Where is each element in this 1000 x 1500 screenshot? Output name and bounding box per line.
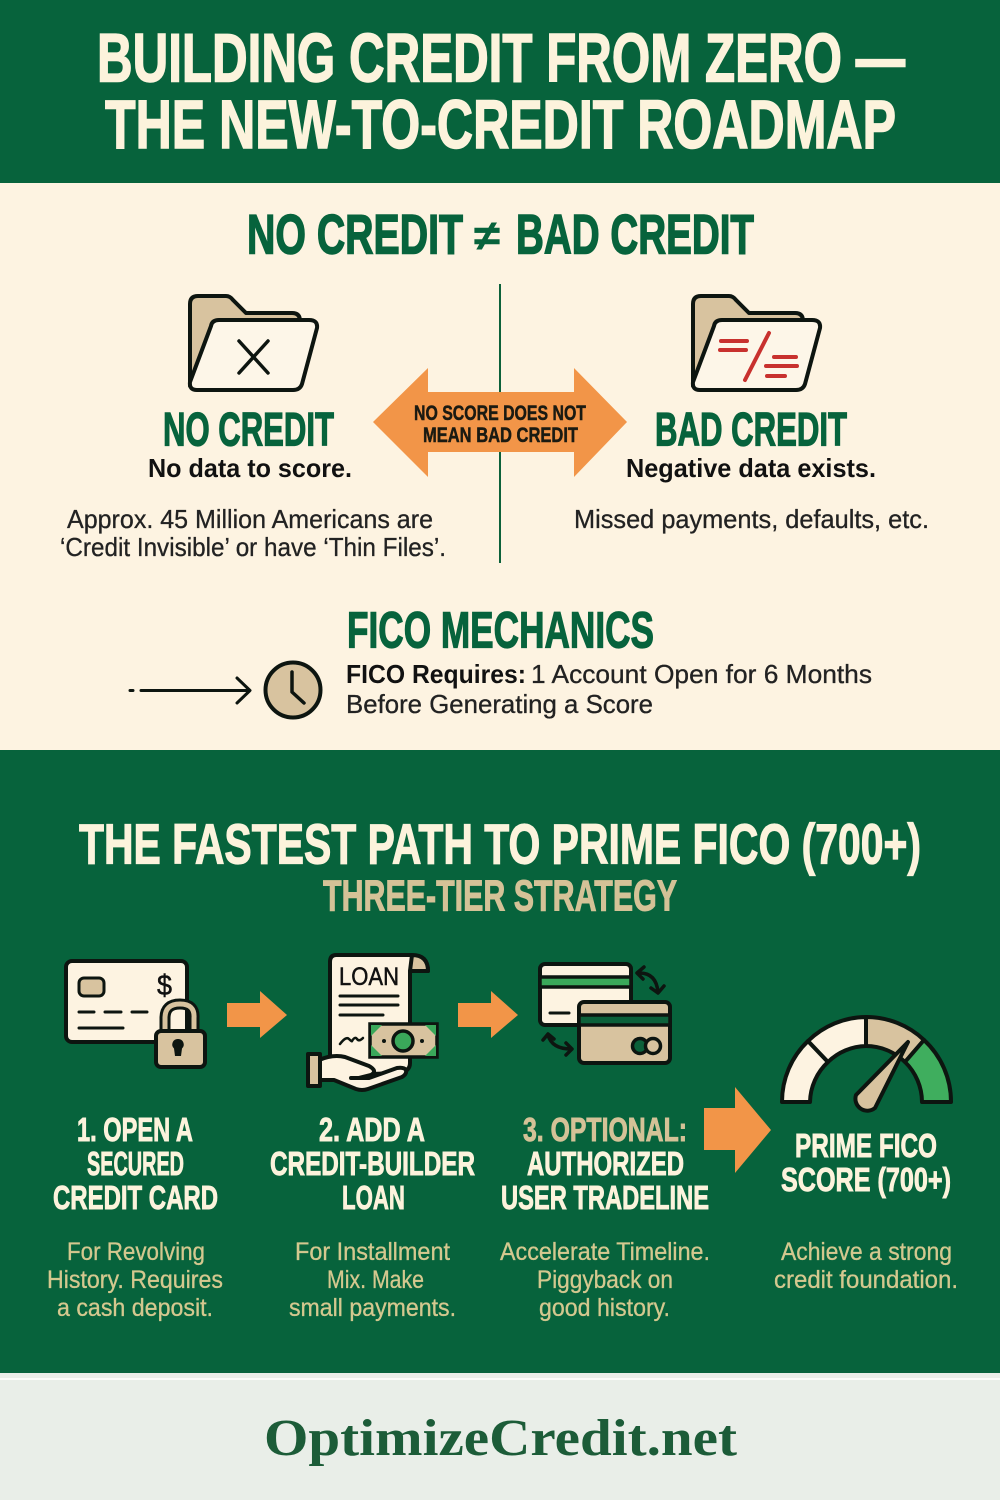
callout arrow: no score does not mean bad credit: NO SCORE DOES NOT	[414, 402, 586, 425]
fico requirement text	[346, 659, 872, 719]
heading: fico mechanics: FICO MECHANICS	[347, 602, 654, 658]
panel: no credit vs bad credit	[0, 183, 1000, 750]
fico requirement text: Before Generating a Score	[346, 689, 653, 719]
prime fico text: SCORE (700+)	[781, 1161, 951, 1198]
heading: no credit is not bad credit: BAD CREDIT	[516, 202, 754, 266]
prime fico text: credit foundation.	[774, 1266, 958, 1294]
bad credit text block: Negative data exists.	[626, 453, 876, 483]
no credit text block: NO CREDIT	[163, 402, 334, 456]
arrow: step 3 to prime score	[704, 1087, 771, 1173]
step 1 text: SECURED	[87, 1145, 184, 1182]
prime fico text: PRIME FICO	[795, 1127, 937, 1164]
step 1 text: CREDIT CARD	[53, 1179, 218, 1216]
step 2 text: LOAN	[342, 1179, 405, 1216]
step 2 text: For Installment	[295, 1238, 450, 1266]
step 3 text	[500, 1111, 710, 1322]
callout arrow: no score does not mean bad credit: MEAN BAD CREDIT	[423, 424, 578, 447]
bad credit text block	[574, 402, 929, 534]
step 3 text: good history.	[539, 1294, 670, 1322]
bad credit text block: BAD CREDIT	[655, 402, 847, 456]
step 2 text: Mix. Make	[327, 1266, 424, 1294]
step 3 text: AUTHORIZED	[527, 1145, 684, 1182]
panel: fastest path	[0, 750, 1000, 1373]
footer brand: OptimizeCredit.net	[264, 1410, 738, 1467]
subheading: three-tier strategy: THREE-TIER STRATEGY	[323, 872, 677, 920]
step 3 text: Accelerate Timeline.	[500, 1238, 710, 1266]
heading: no credit is not bad credit: ≠	[474, 212, 500, 259]
step 1 text: a cash deposit.	[57, 1294, 213, 1322]
step 1 text	[47, 1111, 223, 1322]
arrow: step 2 to step 3	[458, 991, 518, 1038]
step 2 text: small payments.	[289, 1294, 456, 1322]
step 2 text	[270, 1111, 475, 1322]
no credit text block: Approx. 45 Million Americans are	[67, 504, 433, 534]
money bill	[370, 1024, 437, 1057]
heading: no credit is not bad credit: NO CREDIT	[247, 202, 463, 266]
callout arrow: no score does not mean bad credit	[373, 368, 627, 477]
no credit text block: ‘Credit Invisible’ or have ‘Thin Files’.	[60, 532, 446, 562]
icon: secured card with lock	[66, 961, 205, 1067]
footer	[0, 1373, 1000, 1500]
step 2 text: CREDIT-BUILDER	[270, 1145, 475, 1182]
icon: secured card with lock: $	[157, 970, 172, 1002]
icon: loan document: LOAN	[339, 963, 399, 991]
no credit text block	[60, 402, 446, 562]
icon: empty folder	[190, 296, 317, 390]
icon: authorized user cards	[540, 964, 670, 1063]
arrow: step 1 to step 2	[227, 991, 287, 1038]
heading: no credit is not bad credit	[247, 202, 754, 266]
no credit text block: No data to score.	[148, 453, 352, 483]
step 1 text: History. Requires	[47, 1266, 223, 1294]
header band	[0, 0, 1000, 183]
step 3 text: 3. OPTIONAL:	[523, 1111, 687, 1148]
icon: fico gauge	[782, 1017, 951, 1111]
icon: folder with negative marks	[693, 296, 820, 390]
icon: loan document	[308, 955, 437, 1090]
icon: timeline arrow	[130, 678, 250, 703]
fico requirement text: FICO Requires:	[346, 659, 526, 689]
step 3 text: Piggyback on	[537, 1266, 673, 1294]
step 1 text: For Revolving	[67, 1238, 205, 1266]
title	[97, 20, 905, 163]
icon: clock	[266, 662, 320, 718]
prime fico text	[774, 1127, 958, 1294]
step 2 text: 2. ADD A	[319, 1111, 425, 1148]
hand	[308, 1054, 406, 1090]
step 1 text: 1. OPEN A	[77, 1111, 193, 1148]
fico requirement text: 1 Account Open for 6 Months	[531, 659, 872, 689]
prime fico text: Achieve a strong	[781, 1238, 952, 1266]
step 3 text: USER TRADELINE	[501, 1179, 709, 1216]
bad credit text block: Missed payments, defaults, etc.	[574, 504, 929, 534]
